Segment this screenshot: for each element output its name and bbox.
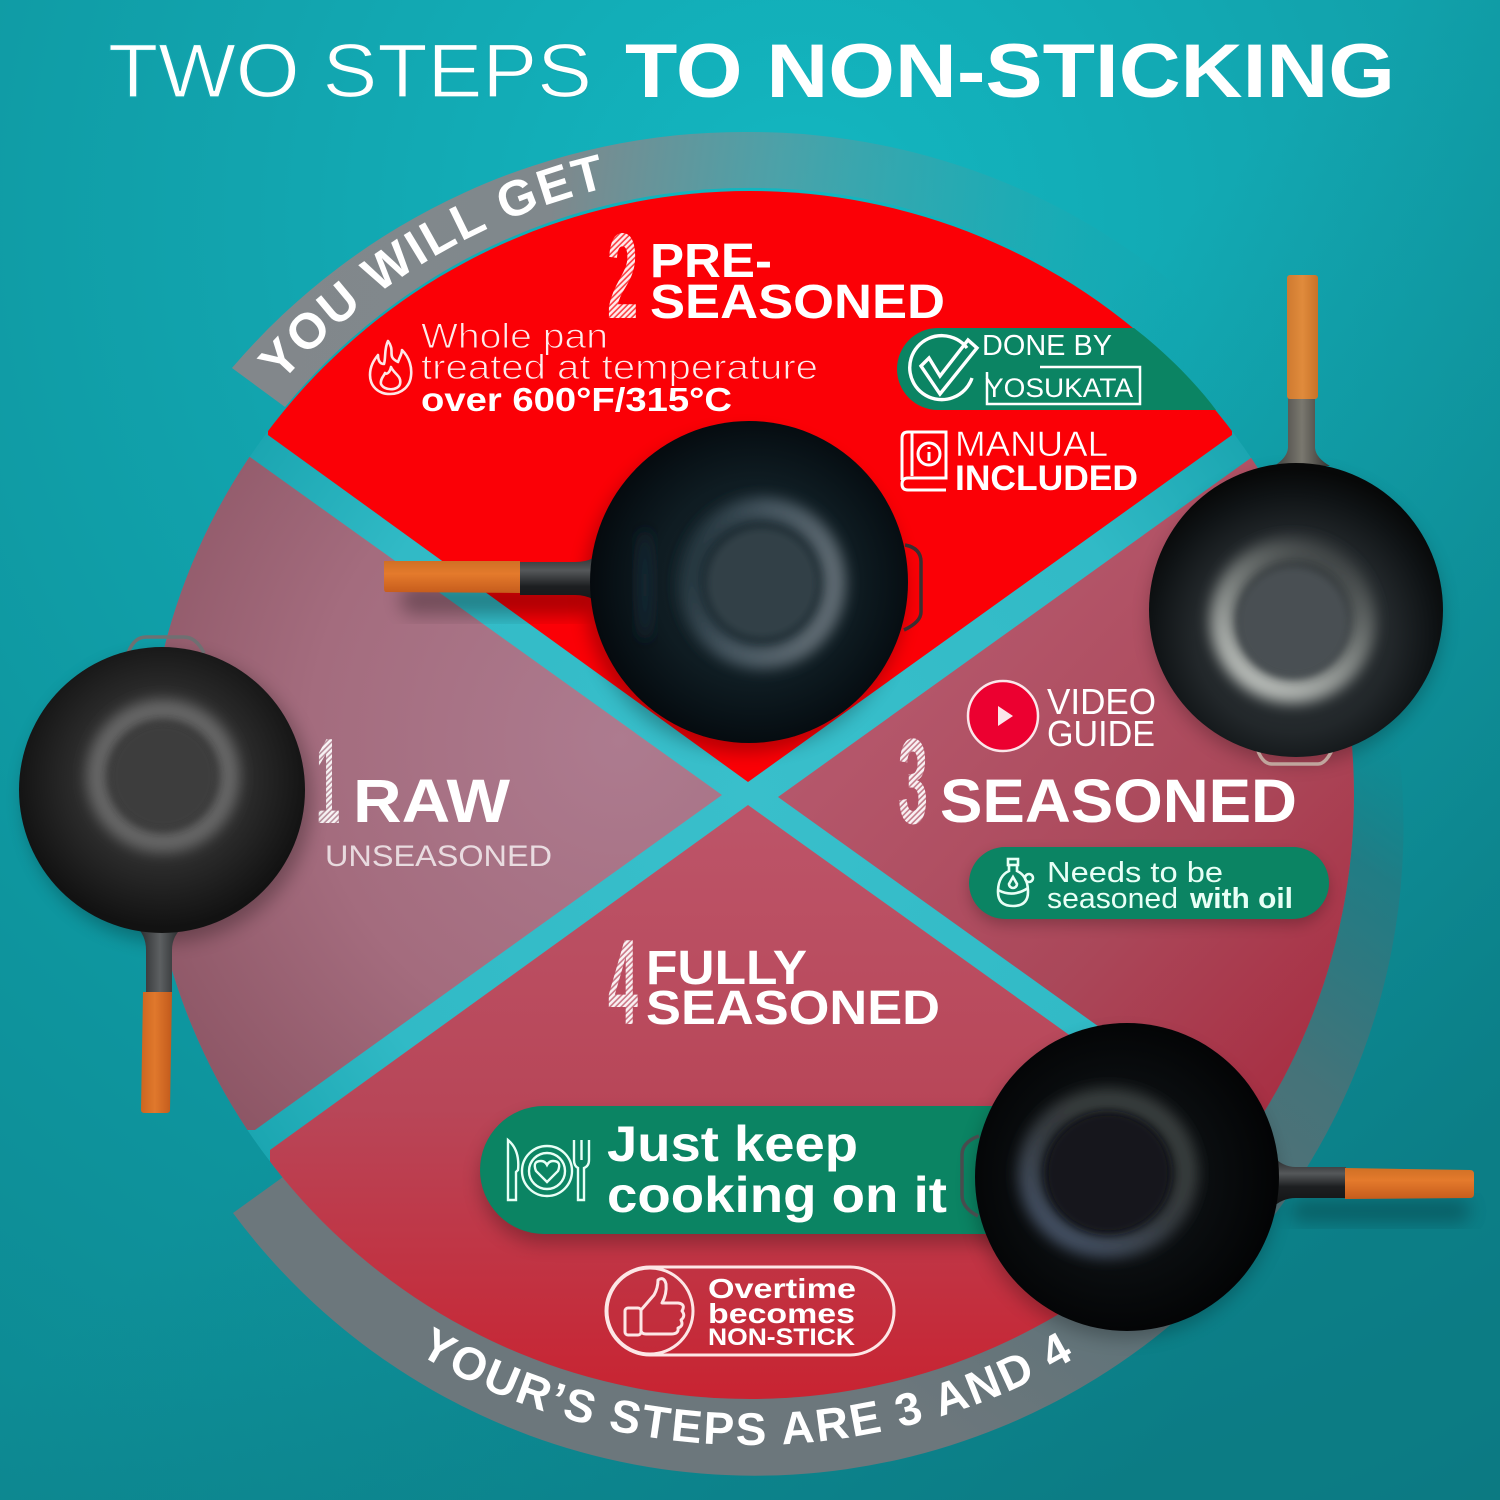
badge: needs to be seasoned with oil: seasoned (1047, 883, 1178, 915)
icon: manual book (902, 432, 946, 490)
badge: overtime becomes non-stick: NON-STICK (708, 1324, 856, 1351)
pan: seasoned wok right (1149, 275, 1443, 764)
pan: pre-seasoned wok centre (384, 421, 921, 752)
icon: video play (968, 681, 1038, 751)
heading: fully seasoned (646, 942, 940, 1035)
pan: raw wok left (19, 637, 312, 1113)
badge: done by yosukata (897, 328, 1216, 410)
badge: needs to be seasoned with oil (969, 847, 1329, 925)
badge: just keep cooking on it: cooking on it (607, 1167, 947, 1223)
ring: your's steps are 3 and 4: YOUR’S STEPS ARE 3 AND 4 (428, 1326, 1072, 1446)
panel: step 4 fully seasoned (480, 914, 1010, 1355)
title: TWO STEPS (108, 29, 592, 114)
badge: overtime becomes non-stick (606, 1267, 894, 1355)
icon: check (910, 336, 977, 400)
heading: seasoned: SEASONED (940, 767, 1297, 835)
panel: step 4 fully seasoned: 4 (608, 914, 638, 1050)
subheading: unseasoned: UNSEASONED (325, 840, 552, 873)
icon: flame (370, 341, 411, 394)
text: manual included: INCLUDED (955, 459, 1138, 498)
badge: needs to be seasoned with oil: Needs to be (1047, 857, 1223, 889)
title: TO NON-STICKING (625, 29, 1395, 114)
heading: pre-seasoned (650, 235, 945, 329)
icon: thumbs up (625, 1279, 684, 1335)
title (108, 29, 1395, 114)
heading: fully seasoned: SEASONED (646, 982, 940, 1035)
heading: fully seasoned: FULLY (646, 942, 807, 995)
text: whole pan treated: treated at temperature (421, 348, 818, 387)
heading: pre-seasoned: PRE- (650, 235, 772, 288)
badge: just keep cooking on it: Just keep (607, 1116, 858, 1172)
pan: fully seasoned wok bottom right (962, 1023, 1474, 1338)
text: video guide (1047, 681, 1156, 754)
text: whole pan treated: over 600°F/315°C (421, 381, 732, 418)
panel: step 2 pre-seasoned: 2 (607, 208, 638, 344)
badge: done by yosukata: DONE BY (982, 330, 1112, 362)
badge: just keep cooking on it (480, 1106, 1010, 1244)
heading: pre-seasoned: SEASONED (650, 276, 945, 329)
text: whole pan treated: Whole pan (421, 317, 608, 356)
panel: step 1 raw (316, 713, 552, 873)
text: manual included (955, 425, 1138, 498)
panel: step 3 seasoned: 3 (898, 713, 928, 849)
badge: overtime becomes non-stick: becomes (708, 1298, 855, 1329)
text: manual included: MANUAL (955, 425, 1108, 464)
panel: step 3 seasoned (898, 681, 1329, 925)
panel: step 2 pre-seasoned (370, 208, 1216, 498)
panel: step 1 raw: 1 (316, 713, 340, 849)
icon: oil bottle (998, 859, 1033, 906)
heading: raw: RAW (353, 767, 510, 835)
pie chart sectors (164, 191, 1354, 1399)
badge: needs to be seasoned with oil: with oil (1189, 883, 1293, 915)
badge: done by yosukata: YOSUKATA (985, 373, 1133, 403)
text: video guide: GUIDE (1047, 713, 1155, 754)
text: video guide: VIDEO (1047, 681, 1156, 722)
ring: you will get: YOU WILL GET (256, 154, 599, 374)
icon: plate and cutlery (508, 1140, 589, 1200)
text: whole pan treated (421, 317, 818, 418)
badge: overtime becomes non-stick: Overtime (708, 1273, 856, 1304)
